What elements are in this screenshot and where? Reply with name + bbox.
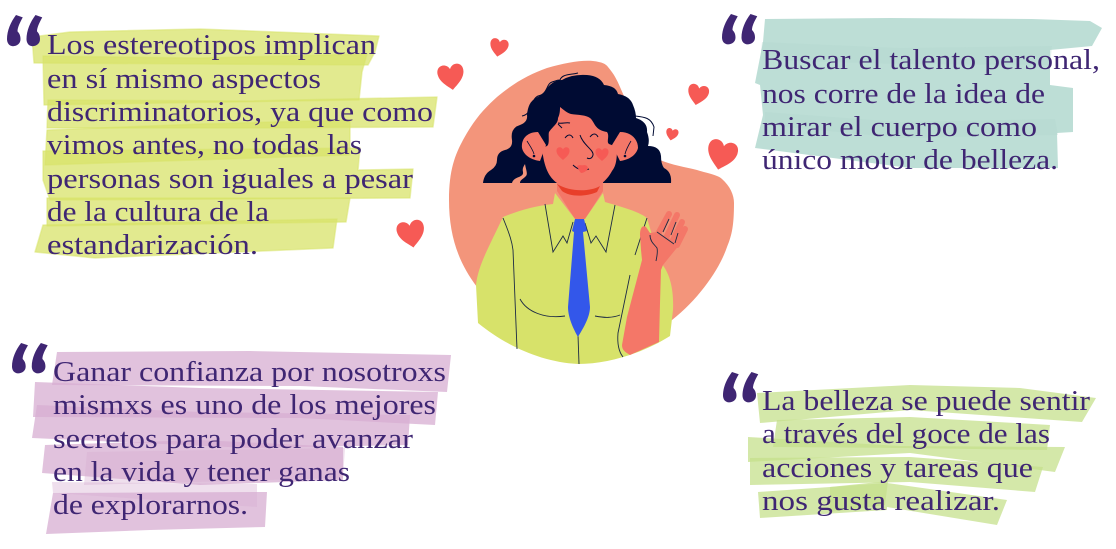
text: stereotypes quote: vimos antes, no todas las <box>47 129 362 161</box>
shirt lines <box>503 204 647 364</box>
icon: quotation mark <box>723 372 758 402</box>
panel: confidence quote <box>12 343 451 534</box>
icon: quotation mark <box>722 14 757 44</box>
highlight: green brush strokes <box>32 29 437 258</box>
text: enjoyment quote: a través del goce de las <box>762 418 1050 450</box>
icon: quotation mark <box>12 343 48 373</box>
neck <box>557 180 603 219</box>
text: stereotypes quote: estandarización. <box>47 229 258 261</box>
text: talent quote: nos corre de la idea de <box>762 78 1045 110</box>
text: stereotypes quote <box>47 29 433 261</box>
text: talent quote <box>762 44 1100 176</box>
text: stereotypes quote: en sí mismo aspectos <box>47 63 321 95</box>
text: confidence quote: Ganar confianza por nosotroxs <box>53 356 446 388</box>
text: talent quote: único motor de belleza. <box>762 144 1058 176</box>
face details <box>558 123 598 170</box>
text: confidence quote: en la vida y tener ganas <box>53 456 350 488</box>
hand lines <box>650 219 678 261</box>
highlight: teal brush strokes <box>755 18 1102 168</box>
text: enjoyment quote <box>762 385 1090 517</box>
icon: quotation mark <box>7 15 42 46</box>
text: enjoyment quote: La belleza se puede sentir <box>762 385 1090 417</box>
earrings and inner ears <box>527 141 631 157</box>
panel: talent quote <box>722 14 1102 176</box>
text: enjoyment quote: acciones y tareas que <box>762 452 1033 484</box>
tie <box>568 219 590 337</box>
text: stereotypes quote: de la cultura de la <box>47 196 269 228</box>
hair strand lines <box>522 73 578 116</box>
hair <box>483 75 671 183</box>
arm and hand <box>622 214 685 355</box>
text: stereotypes quote: personas son iguales a pesar <box>47 163 413 195</box>
collar shadow <box>557 184 600 196</box>
ears <box>522 132 638 161</box>
text: talent quote: mirar el cuerpo como <box>762 111 1037 143</box>
highlight: purple brush strokes <box>32 351 451 534</box>
text: stereotypes quote: discriminatorios, ya que como <box>47 96 433 128</box>
panel: stereotypes quote <box>7 15 437 261</box>
shirt <box>476 193 673 364</box>
illustration: woman with hearts <box>395 37 740 364</box>
panel: enjoyment quote <box>723 372 1096 525</box>
text: talent quote: Buscar el talento personal, <box>762 44 1100 76</box>
text: stereotypes quote: Los estereotipos implican <box>47 29 377 61</box>
text: enjoyment quote: nos gusta realizar. <box>762 485 1000 517</box>
background blob <box>449 61 734 360</box>
text: confidence quote: secretos para poder avanzar <box>53 423 413 455</box>
hearts <box>395 37 740 250</box>
text: confidence quote: mismxs es uno de los mejores <box>53 389 436 421</box>
text: confidence quote <box>53 356 446 521</box>
face <box>542 107 617 190</box>
mouth <box>577 165 588 173</box>
cheeks <box>556 147 609 161</box>
text: confidence quote: de explorarnos. <box>53 489 248 521</box>
highlight: light green brush strokes <box>748 385 1096 525</box>
